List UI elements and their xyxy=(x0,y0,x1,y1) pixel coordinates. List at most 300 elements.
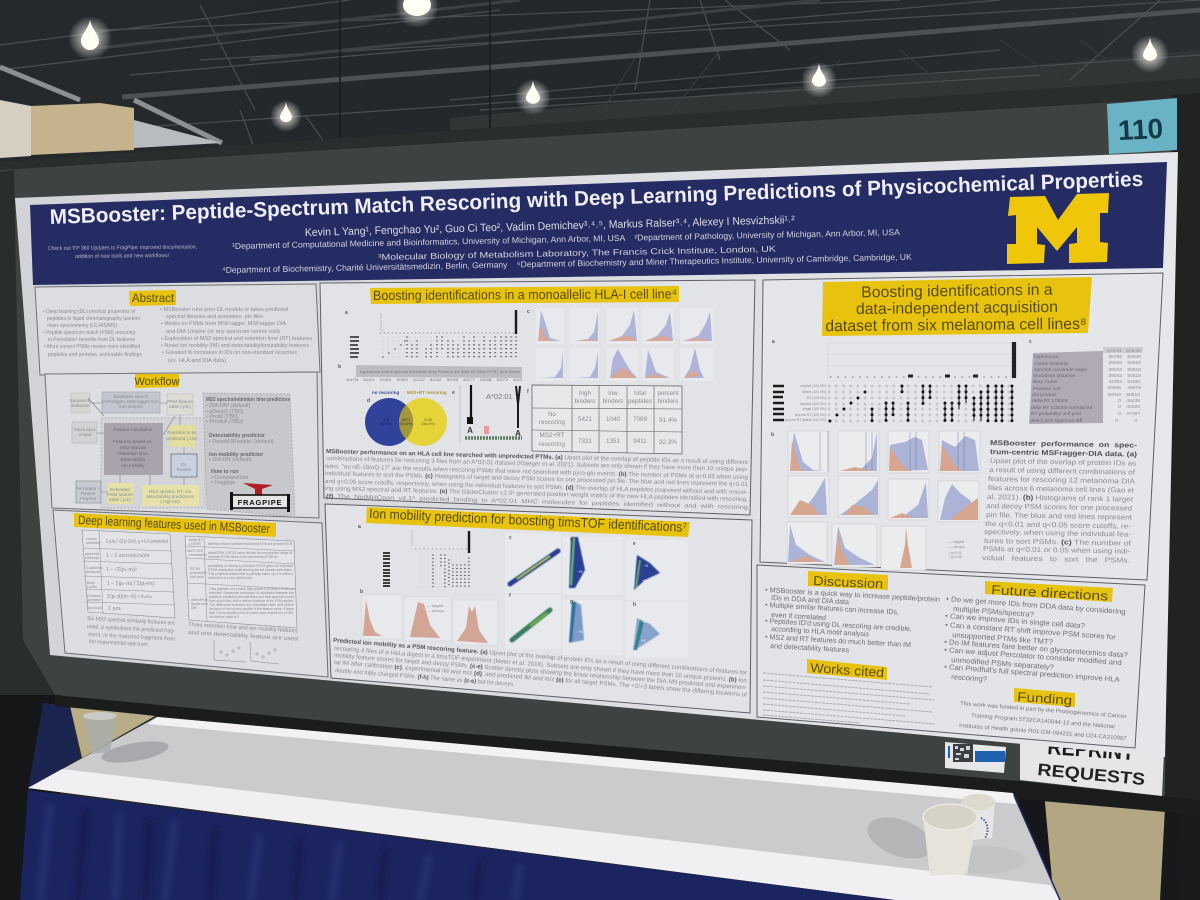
feature table c: 38756 xyxy=(1108,354,1122,360)
heading: DIA melanoma: data-independent acquisition xyxy=(856,299,1058,318)
discussion bullets: according to HLA motif analysis xyxy=(771,624,870,638)
heading: future directions: Future directions xyxy=(991,582,1109,604)
histograms b: — targets xyxy=(949,540,964,544)
scatter density plots c-h: f xyxy=(509,593,511,599)
discussion bullets xyxy=(765,585,940,654)
retention time features table: difference between calibrated experimental RT/IM and predicted RT/IM xyxy=(208,542,292,546)
abstract text: • Novel ion mobility (IM) and detectability/ionizability features xyxy=(161,343,309,349)
sequence logo e: e xyxy=(452,390,455,396)
workflow diagram: predicted (.csv) xyxy=(166,436,198,441)
table f: MS2+RT xyxy=(540,432,565,439)
retention time features table: delta RT LOESS xyxy=(187,549,203,553)
caption: DIA text xyxy=(982,440,1138,565)
table f: 7331 xyxy=(578,438,592,445)
histograms b xyxy=(771,431,980,570)
feature table c: dot product xyxy=(1032,392,1057,398)
heading: funding: Funding xyxy=(1017,689,1073,708)
upset plot a: original (100.0%) xyxy=(800,384,826,388)
spectral features table: dot product xyxy=(88,606,103,610)
scatter density plots c-h: +3 xyxy=(642,579,646,583)
table f: rescoring xyxy=(539,419,565,426)
panel: monoallelic HLA-I cell line xyxy=(320,280,755,515)
workflow diagram: DL xyxy=(181,462,187,467)
predictors box: • Fragpipe xyxy=(211,480,235,486)
upset plot: a xyxy=(358,524,361,530)
caption: DIA text: tures to sort PSMs. (c) The number of xyxy=(984,538,1131,548)
spectral features table: 1 − Σ|pᵢ−mᵢ| / Σ(pᵢ+mᵢ) xyxy=(107,581,155,587)
retention time features table: delta RT xyxy=(189,538,203,542)
discussion bullets: even if correlated xyxy=(771,610,826,622)
spectral features table: correlation xyxy=(87,598,101,602)
future directions bullets: multiple PSMs/spectra? xyxy=(953,604,1034,619)
reprint requests sign: REPRINT xyxy=(1047,734,1136,765)
scatter density plots c-h: e xyxy=(633,541,636,547)
predictors box: • pDeep3 (TBD) xyxy=(206,409,244,415)
caption: ion mobility: tal IM after calibration (c), experimental IM and m/z (d), and predicted IM and m/z (e) for all target PSMs. The +2/+3 labels show the differing locations of xyxy=(334,660,747,699)
retention time features table: predicted RT/IM values in the experimental RT/IM bin xyxy=(208,555,278,559)
retention time features table: LOESS xyxy=(189,542,202,546)
wooden crate xyxy=(31,103,134,155)
table f: binders xyxy=(658,398,678,405)
abstract text: in Percolator¹ benefits from DL features xyxy=(48,337,135,343)
feature table c: Pearson corr xyxy=(1033,386,1061,392)
histograms b xyxy=(362,595,498,645)
workflow diagram: table (.pin) xyxy=(109,497,131,502)
histograms b: — targets xyxy=(427,604,444,608)
retention time features table: RT/IM xyxy=(190,567,200,571)
caption: DIA text: a result of using different combinations of xyxy=(989,467,1135,477)
note on FragPipe xyxy=(48,244,197,260)
caption: DIA text: Upset plot of the overlap of protein IDs as xyxy=(990,458,1137,468)
caption: ion mobility: mobility feature scores for target and decoy PSMs. (c-e) Scatter density plots showing the linear relationship between the DIA-NN predicted and experimen- xyxy=(334,653,747,691)
funding text: Training Program 5T32CA140044-12 and the National xyxy=(971,713,1115,730)
spectral features table: spectral xyxy=(85,552,99,556)
poster sheet xyxy=(15,152,1178,757)
feature table c: q<0.05 xyxy=(1126,348,1141,354)
histograms c: c xyxy=(527,309,530,315)
feature table c: 42383 xyxy=(1108,379,1122,385)
spectral features table: cosine xyxy=(86,537,97,541)
abstract text: • More correct PSMs means more identified xyxy=(44,344,140,350)
feature table c: 51581 xyxy=(1127,379,1141,385)
retention time caption xyxy=(188,622,298,643)
workflow diagram: MSFragger, MSFragger DIA, xyxy=(102,399,160,404)
QR code sticker xyxy=(945,742,1006,773)
sequence logo e: A*02:01 xyxy=(486,392,513,401)
scatter density plots c-h: +3 xyxy=(578,630,582,634)
wall at left xyxy=(0,100,31,158)
venn diagram d: d xyxy=(367,398,370,404)
caption: ion mobility: doubly and triply charged PSMs. (f-h) The same as (c-e) but for decoys. xyxy=(335,668,515,688)
heading: works cited: Works cited xyxy=(810,660,885,680)
caption: HLA cell line: ing using MS2 spectral and RT features. (e) The GibbsCluster v2.0⁵ generated position weight matrix of the new HLA peptides identified with rescoring. xyxy=(325,485,748,503)
caption: DIA text: spectively, when using the individual fea- xyxy=(984,529,1132,539)
heading: monoallelic HLA-I: Boosting identifications in a monoallelic HLA-I cell line⁴ xyxy=(373,286,677,303)
venn diagram d xyxy=(365,390,447,446)
spectral features table: similarity xyxy=(86,541,101,545)
retention time features table: than 2 more peptides from a protein were matched to a PSM, xyxy=(209,611,294,615)
future directions bullets: rescoring? xyxy=(951,672,987,684)
abstract text: • MSBooster runs prior DL models or takes predicted xyxy=(160,307,288,313)
scatter density plots c-h: g xyxy=(570,599,573,605)
panel: discussion and future directions xyxy=(757,565,1145,748)
retention time features table: inclusion of the current peptide is the feature value. If fewer xyxy=(209,607,295,611)
panel: workflow xyxy=(45,372,319,518)
retention time features table: unif prior xyxy=(190,575,205,579)
table f: 1040 xyxy=(606,416,620,423)
upset plot a: a xyxy=(772,339,775,345)
venn diagram d: 416 xyxy=(383,418,389,422)
feature table c: 50048 xyxy=(1127,354,1141,360)
spectral features table: Pearson xyxy=(87,594,101,598)
abstract text: peptides in liquid chromatography tandem xyxy=(47,316,140,322)
booth number sign: 110 xyxy=(1117,113,1164,146)
panel: DIA melanoma dataset xyxy=(760,273,1163,580)
venn diagram d: no rescoring xyxy=(372,390,400,395)
caption: DIA text: PSMs at q<0.01 or 0.05 when using indi- xyxy=(983,546,1131,556)
predictors box: MS2 spectra/retention time predictors xyxy=(206,397,290,403)
spectral features table: Σ pᵢmᵢ xyxy=(108,606,121,612)
venn diagram d: (50.8%) xyxy=(399,422,413,426)
predictors box: Detectability predictor xyxy=(209,433,265,439)
scatter density plots c-h: +2 xyxy=(642,620,646,624)
retention time features table: Spearman xyxy=(191,602,208,606)
retention time features table: probability of having a predicted RT/IM given an empirical xyxy=(208,564,293,568)
workflow diagram: Features based on: xyxy=(113,439,153,444)
feature table c: 39043 xyxy=(1108,367,1122,373)
workflow diagram: Mass spec xyxy=(74,427,97,432)
note on FragPipe: Check out 'FP 360 Updates to FragPipe: improved documentation, xyxy=(48,244,197,252)
histograms b: — decoys xyxy=(949,545,965,549)
spectral features table: Σ pᵢmᵢ / √(Σp²·Σm²), pᵢ = 0 if unmatched xyxy=(106,538,168,545)
caption: ion mobility: Predicted ion mobility as a PSM rescoring feature. (a) Upset plot of the overlap of protein IDs as a result of using different combinations of features for xyxy=(333,638,747,677)
predictors box: • DIA-NN (default) xyxy=(209,457,252,463)
table f: binders xyxy=(603,398,623,405)
caption: HLA cell line: individual features to sort the PSMs. (c) Histograms of target and decoy PSM scores for one processed pin file. The blue and red lines represent the q<0.01 xyxy=(325,471,749,488)
floor and table xyxy=(0,695,1200,900)
heading: DIA melanoma: dataset from six melanoma cell lines⁸ xyxy=(825,316,1087,335)
retention time caption: Three retention time and ion mobility features xyxy=(188,622,298,635)
funding text: This work was funded in part by the Proteogenomics of Cancer xyxy=(960,701,1127,720)
table f: peptides xyxy=(628,398,652,405)
retention time features table: peptides' predicted detectabilities and total spectral counts xyxy=(209,595,294,599)
table f: 91.4% xyxy=(659,417,677,424)
spectral features caption: used. p symbolizes the predicted frag- xyxy=(87,624,175,635)
icon: FragPipe logo: FRAGPIPE xyxy=(238,498,282,507)
discussion bullets: IDs in DDA and DIA data xyxy=(771,593,849,606)
upset plot a: detect (100.0%) xyxy=(802,390,826,394)
header banner xyxy=(30,162,1167,285)
table f: 1351 xyxy=(606,438,620,445)
caption: HLA cell line: and q<0.05 score cutoffs, respectively, when using the individual features to sort PSMs. (d) The overlap of HLA peptides proposed without and with rescor- xyxy=(325,479,748,496)
retention time features table: normalized xyxy=(189,553,207,557)
future directions bullets: • Do IM features fare better on glycoproteomics data? xyxy=(944,637,1128,659)
predictors box: Ion mobility predictor xyxy=(209,452,263,458)
workflow diagram: Extended xyxy=(110,487,130,492)
spectral features table: distance xyxy=(86,570,100,574)
discussion bullets: • MS2 and RT features do much better than IM xyxy=(765,632,911,649)
reprint requests sign: REQUESTS xyxy=(1037,760,1146,789)
predictors box: • DIA-NN² (default) xyxy=(206,403,250,409)
caption: DIA text: trum-centric MSFragger-DIA data. (a) xyxy=(990,449,1137,459)
future directions bullets: • Do we get more IDs from DDA data by considering xyxy=(946,594,1126,616)
feature table c: 45025 xyxy=(1126,404,1140,410)
workflow diagram: detectability predictions xyxy=(146,494,195,499)
feature table c: Euclidean distance xyxy=(1034,373,1075,379)
spectral features table: contrast angle xyxy=(85,556,99,560)
spectral features table: Euclidean xyxy=(86,566,103,570)
table f: f xyxy=(527,389,529,395)
reprint requests sign xyxy=(1020,734,1164,796)
feature table c: 39043 xyxy=(1107,392,1121,398)
feature table c: 0 xyxy=(1118,404,1121,410)
feature table c: 46438 xyxy=(1126,398,1140,404)
sequence logo e: A xyxy=(515,429,521,438)
workflow diagram: Retention time xyxy=(118,451,148,456)
abstract text: (ex. HLA and DIA data) xyxy=(168,358,226,364)
upset plot a: a xyxy=(345,310,348,316)
booth number sign xyxy=(1107,98,1177,154)
feature table c: cosine similarity xyxy=(1034,361,1069,367)
scatter density plots c-h: d xyxy=(570,537,573,543)
feature table c: RT probability unif prior xyxy=(1031,411,1082,417)
panel: abstract xyxy=(35,284,320,375)
abstract text: • Works on PSMs from MSFragger, MSFragger DIA xyxy=(161,321,286,327)
workflow diagram: Detectability xyxy=(120,457,146,462)
heading: abstract: Abstract xyxy=(132,293,175,305)
caption: HLA cell line: MSBooster performance on an HLA cell line searched with unpredicted PTMs. (a) Upset plot of the overlap of peptide IDs as a result of using different xyxy=(326,449,748,466)
table f: rescoring xyxy=(539,441,565,448)
upset plot a: spectra RT (100.0%) xyxy=(795,413,826,417)
discussion bullets: • Multiple similar features can increase IDs, xyxy=(765,600,899,616)
workflow diagram: output xyxy=(79,432,92,437)
retention time features table: detectProt xyxy=(191,598,207,602)
workflow diagram: Protein xyxy=(81,491,96,496)
feature table c: 39043 xyxy=(1108,373,1122,379)
upset plot a: RT (100.0%) xyxy=(807,396,826,400)
floor xyxy=(1040,795,1200,900)
table f: 7069 xyxy=(633,416,647,423)
feature table c: 47367 xyxy=(1126,411,1140,417)
abstract text: • Greatest % increases in IDs on non-standard searches xyxy=(162,350,297,356)
table f: binders xyxy=(575,398,595,405)
workflow diagram: models xyxy=(177,467,192,472)
abstract text: • Exploration of MS2 spectral and retention time (RT) features xyxy=(161,336,312,342)
workflow diagram: PSM feature xyxy=(167,399,193,404)
paper cups xyxy=(862,794,1025,876)
small scatter plots xyxy=(214,640,279,664)
caption: HLA cell line: combinations of features for rescoring 3 files from an A*02:01 dataset (Klaeger et al. 2021). Subsets are only shown if they have more than 10 unique pep- xyxy=(326,456,748,473)
venn diagram d: 6871 xyxy=(402,418,410,422)
funding text xyxy=(959,701,1127,742)
heading: ion mobility: Ion mobility prediction for boosting timsTOF identifications⁷ xyxy=(369,506,687,535)
spectral features table xyxy=(82,530,175,618)
lower left dark area and curtain xyxy=(0,695,60,900)
upset plot: b xyxy=(360,589,363,595)
table f xyxy=(527,385,682,454)
panel: deep learning features xyxy=(53,510,328,677)
predictors box: • Prosit (TBD) xyxy=(206,414,239,420)
heading: abstract xyxy=(129,290,176,306)
table f: 92.3% xyxy=(659,439,677,446)
funding text: Institutes of Health grants R01-GM-094231 and U24-CA210967 xyxy=(959,723,1127,742)
spectral features caption: ment, m the matched fragment from xyxy=(88,632,175,643)
predictors box: • Predfull (TBD) xyxy=(206,419,243,425)
feature table c: 0 xyxy=(1134,418,1137,424)
predictors box: • DeepMSPeptide³ (default) xyxy=(209,439,274,445)
upset plot a: spectra RT detect (100.0%) xyxy=(785,418,826,422)
workflow diagram: Percolator + xyxy=(76,486,101,491)
feature table c: 0 xyxy=(1118,398,1121,404)
caption: HLA cell line: (f) The NetMHCpan v4.1⁶ predicted binding to A*02:01 MHC molecules for peptides identified without and with rescoring xyxy=(326,493,748,511)
retention time features table: probability xyxy=(190,571,207,575)
works cited list xyxy=(763,673,935,724)
ceiling lights xyxy=(68,0,1169,132)
workflow diagram: Feature calculation xyxy=(114,427,153,432)
caption: HLA cell line: tides. "no nE-18/nQ-17" are the results when rescoring PSMs that were not searched with pyro-glu events. (b) The number of PSMs at q<0.05 when using xyxy=(325,464,748,481)
predictors box: How to run xyxy=(211,469,239,475)
scatter density plots c-h: +2 xyxy=(578,539,582,543)
spectral features caption: the experimental spectrum. xyxy=(89,639,150,648)
abstract text: mass spectrometry (LC-MS/MS) xyxy=(47,323,117,329)
caption: DIA text: pin file. The blue and red lines represent xyxy=(986,512,1132,522)
caption: DIA text: MSBooster performance on spec- xyxy=(990,440,1138,450)
future directions bullets: • Can a constant RT shift improve PSM scores for xyxy=(945,620,1117,642)
workflow diagram: (.mgf etc) xyxy=(160,499,180,504)
table f: No xyxy=(548,411,557,418)
predictors box: • Command line xyxy=(211,475,249,481)
strip b: PSM counts xyxy=(338,364,522,382)
scatter density plots c-h: +3 xyxy=(641,639,645,643)
workflow diagram xyxy=(70,392,205,508)
table f: percent xyxy=(657,390,679,397)
workflow diagram: Ion mobility xyxy=(121,463,145,468)
feature table c: 50518 xyxy=(1127,367,1141,373)
future directions bullets: unsupported PTMs like TMT? xyxy=(952,630,1053,646)
retention time features table: distribution of a user-defined size xyxy=(208,576,252,580)
affiliations xyxy=(222,227,912,275)
histograms b: — decoys xyxy=(427,609,444,613)
heading: DIA melanoma xyxy=(822,277,1092,336)
feature table c: 30508 xyxy=(1107,385,1121,391)
future directions bullets: • Can we improve IDs in single cell data? xyxy=(945,611,1085,630)
workflow diagram: Database search xyxy=(114,394,149,399)
workflow diagram: table (.pin) xyxy=(169,404,191,409)
strip b: PSM counts: b xyxy=(338,364,341,370)
abstract text: spectral libraries and annotates .pin files xyxy=(166,314,263,320)
scatter density plots c-h: h xyxy=(633,602,636,608)
scatter density plots c-h: +2 xyxy=(644,564,648,568)
affiliations: ⁴Department of Biochemistry, Charité Universitätsmedizin, Berlin, Germany ⁵Department of Biochemistry and Miner Therapeutics Institute, University of Cambridge, Cambridge, UK xyxy=(222,252,912,275)
retention time features table: This empirical distribution is partially made up of a uniform xyxy=(208,572,293,576)
affiliations: ¹Department of Computational Medicine and Bioinformatics, University of Michigan, Ann Arbor, MI, USA ²Department of Pathology, University of Michigan, Ann Arbor, MI, USA xyxy=(232,227,900,251)
spectral features table: Σ(p−p̄)(m−m̄) / σₚσₘ xyxy=(107,593,152,600)
workflow diagram: database xyxy=(71,403,90,408)
heading: workflow: Workflow xyxy=(134,376,180,388)
feature table c: detect prot Sperman diff xyxy=(1030,418,1083,424)
retention time features table: Tries peptides of a protein that appear in at least 1 PSM are xyxy=(209,587,294,591)
affiliations: ³Molecular Biology of Metabolism Laboratory, The Francis Crick Institute, London, UK xyxy=(378,244,776,262)
histograms c xyxy=(527,308,713,381)
caption: ion mobility xyxy=(333,638,747,699)
feature table c: c xyxy=(1029,339,1032,345)
feature table c: 39043 xyxy=(1108,360,1122,366)
retention time features table: deltaRT/IM LOESS value divided by interquartile range of xyxy=(208,551,292,555)
histograms b: b xyxy=(771,432,774,438)
scatter density plots c-h: +2 xyxy=(578,600,582,604)
note on FragPipe: addition of new tools and new workflows! xyxy=(75,253,169,260)
retention time features table xyxy=(185,536,297,628)
feature table c: 0 xyxy=(1115,418,1118,424)
title: MSBooster: Peptide-Spectrum Match Rescoring with Deep Learning Predictions of Physicochemical Properties xyxy=(49,168,1144,229)
future directions bullets: • Can Predfull's full spectral prediction improve HLA xyxy=(944,662,1120,684)
feature table c: 50518 xyxy=(1127,360,1141,366)
retention time features table: RT/IM distribution estimated by kernel density estimation. xyxy=(208,568,293,572)
abstract text: peptides and proteins, actionable findings xyxy=(48,352,142,358)
venn diagram d: (3.1%) xyxy=(380,422,392,426)
University of Michigan M logo xyxy=(1007,193,1109,264)
table top xyxy=(28,717,1060,900)
retention time features table: Diff xyxy=(191,606,196,610)
caption: DIA text: files across 6 melanoma cell lines (Gao et xyxy=(988,485,1134,495)
black board base xyxy=(55,695,1200,815)
scatter density plots c-h xyxy=(505,533,688,658)
spectral features caption xyxy=(87,616,175,648)
icon: FragPipe logo xyxy=(230,483,290,512)
caption: DIA text: the q<0.01 and q<0.05 score cutoffs, re- xyxy=(985,521,1132,531)
feature table c: Bray Curtis xyxy=(1033,379,1058,385)
retention time features table: The difference between the correlation after and before xyxy=(209,603,294,607)
sequence logo e xyxy=(452,385,522,443)
spectral features table: 1 − √Σ(pᵢ−mᵢ)² xyxy=(106,566,137,573)
strip b: PSM counts: 4478 3241 3182 3082 3122 4032 3098 4377 3908 3972 342 xyxy=(346,378,522,382)
caption: HLA cell line xyxy=(325,449,749,511)
strip b: PSM counts: hyperscore cosine spectral Euclidean Bray Pearson dot delta RT delta RT RT prob detect xyxy=(360,370,520,374)
scatter density plots c-h: +3 xyxy=(578,570,582,574)
abstract text: and DIA Umpire (or any spectrum centric tool) xyxy=(166,329,280,335)
workflow diagram: Peptides to be xyxy=(167,430,197,435)
abstract text: • Peptide spectrum match (PSM) rescoring xyxy=(43,330,135,336)
future directions bullets xyxy=(944,594,1128,684)
upset plot xyxy=(358,524,470,595)
upset plot a xyxy=(345,310,516,358)
upset plot a: spectra (100.0%) xyxy=(800,402,826,406)
panel: ion mobility xyxy=(325,504,752,713)
heading: DIA melanoma: Boosting identifications in a xyxy=(861,282,1053,301)
future directions bullets: • Can we adjust Percolator to consider modified and xyxy=(944,645,1122,667)
feature table c: hyperscore xyxy=(1034,354,1058,360)
spectral features table: 1 − 2·arccos(cos)/π xyxy=(106,553,150,559)
clear plastic cup xyxy=(83,712,170,767)
feature table c: delta RT LOESS xyxy=(1032,398,1069,404)
venn diagram d: (36.4%) xyxy=(421,422,435,426)
heading: deep learning features: Deep learning features used in MSBooster xyxy=(78,513,270,536)
feature table c: q<0.01 xyxy=(1107,348,1122,354)
discussion bullets: and detectability features xyxy=(770,641,850,654)
table f: high xyxy=(579,390,591,397)
abstract text xyxy=(43,307,312,364)
caption: DIA text: features for rescoring 12 melanoma DIA xyxy=(988,476,1135,486)
caption: ion mobility: rescoring 4 files of a HeLa digest in a timsTOF experiment (Meier et al. 2018). Subsets are only shown if they have more than 10 unique proteins. (b) Ion xyxy=(334,646,747,684)
retention time features table: selected. Spearman correlation is calculated between the xyxy=(209,591,294,595)
sequence logo e: A xyxy=(467,426,473,435)
future directions bullets: unmodified PSMs separately? xyxy=(951,655,1054,672)
table f: 5421 xyxy=(578,416,592,423)
upset plot a xyxy=(772,339,1014,422)
scatter density plots c-h: c xyxy=(509,535,512,541)
workflow diagram: PSM feature xyxy=(107,492,133,497)
retention time features table: from all pin files, with a defined distance of the PSM peptide. xyxy=(209,599,294,603)
